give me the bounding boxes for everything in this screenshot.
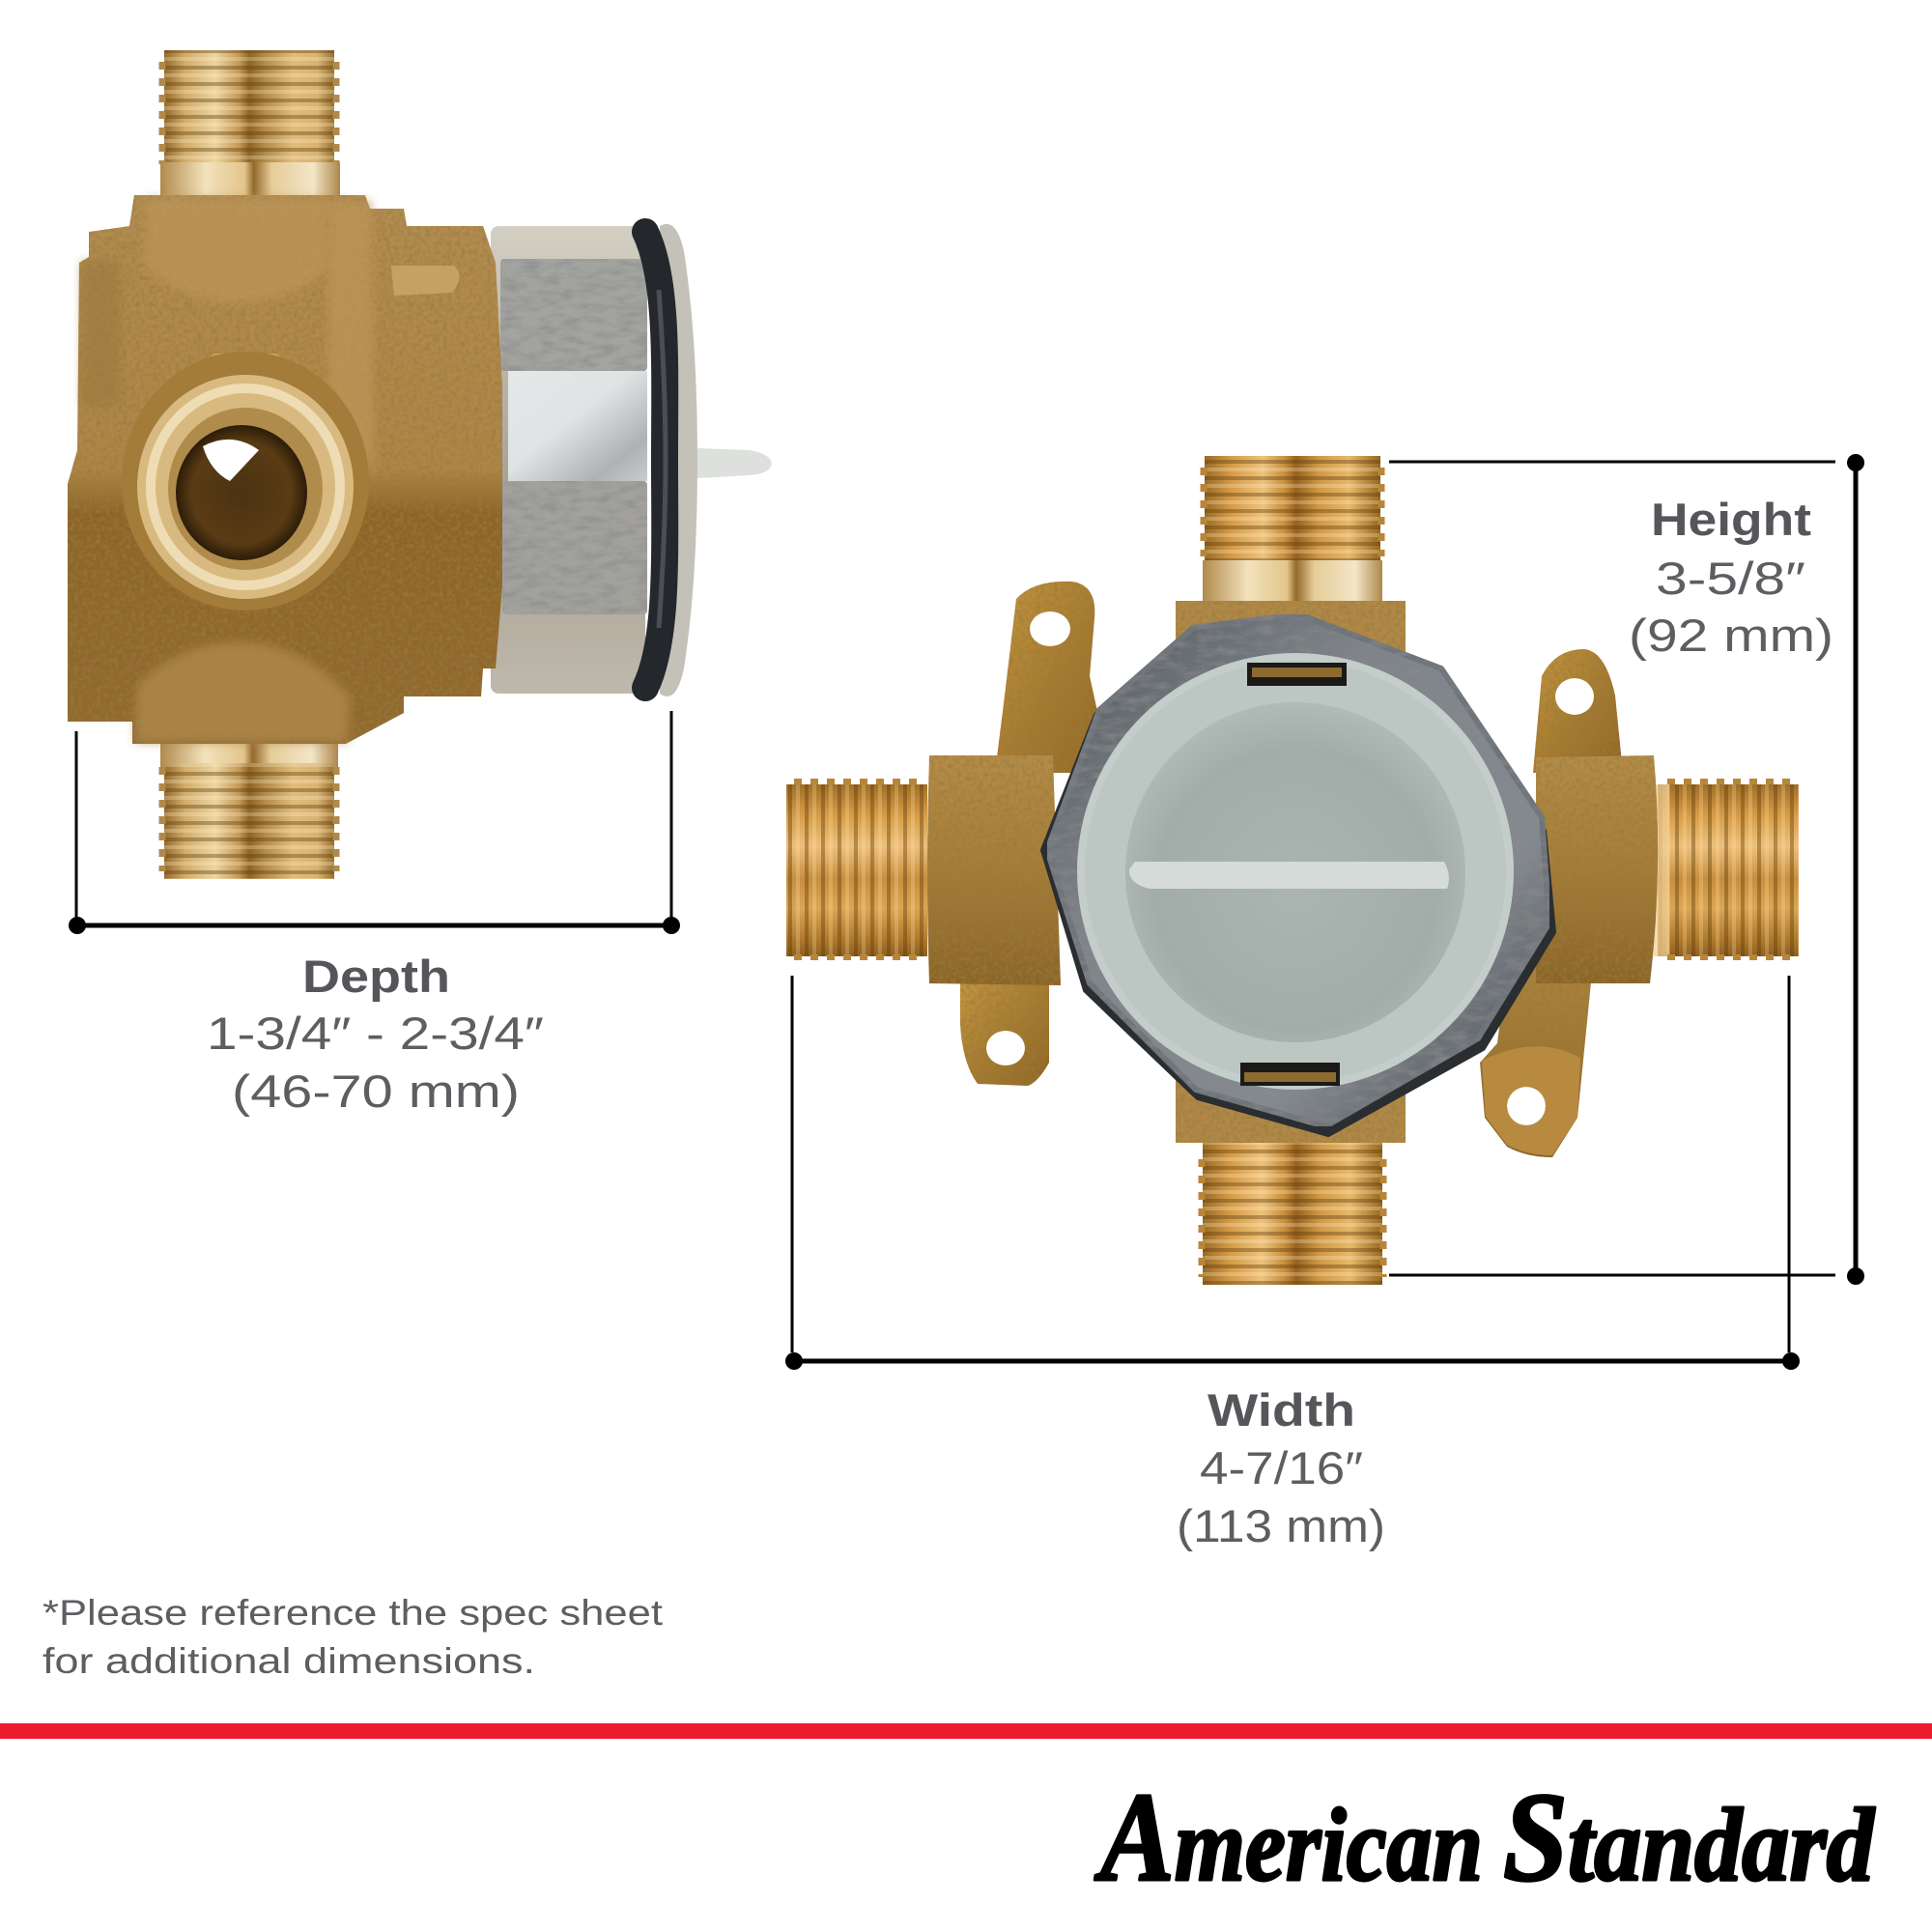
inner cup — [1125, 702, 1465, 1042]
brass body — [68, 195, 502, 744]
centre bar — [1129, 862, 1449, 889]
width label: Width — [1208, 1384, 1355, 1435]
depth dimension — [69, 711, 680, 934]
footnote: *Please reference the spec sheet — [43, 1593, 664, 1633]
indicator pin — [697, 448, 772, 478]
brand logo: American — [1094, 1766, 1483, 1908]
hex nut — [1043, 614, 1553, 1134]
vertical rib — [328, 201, 375, 478]
brand logo: Standard — [1503, 1766, 1876, 1908]
top threaded connector — [1203, 456, 1382, 601]
bottom threaded connector — [160, 734, 338, 879]
left edge recess — [81, 261, 120, 406]
width label: (113 mm) — [1177, 1500, 1385, 1551]
silver nut — [491, 226, 647, 694]
depth label — [207, 951, 544, 1117]
height label: Height — [1651, 494, 1811, 545]
width label — [1177, 1384, 1385, 1551]
brand logo — [1094, 1766, 1876, 1908]
top slot — [1247, 663, 1347, 686]
depth label: Depth — [302, 951, 450, 1002]
cast logo mark — [391, 266, 460, 296]
front view valve — [786, 456, 1799, 1285]
height label: (92 mm) — [1629, 610, 1833, 661]
footnote — [43, 1593, 664, 1681]
bottom-right mounting ear — [1480, 869, 1594, 1157]
side outlet port — [122, 352, 369, 611]
right body block — [1536, 755, 1658, 983]
depth label: 1-3/4″ - 2-3/4″ — [207, 1008, 544, 1059]
top-left mounting ear — [995, 582, 1111, 773]
depth label: (46-70 mm) — [232, 1065, 520, 1117]
left threaded connector — [786, 781, 927, 957]
right threaded connector — [1654, 781, 1799, 957]
bottom-left mounting ear — [960, 980, 1049, 1086]
height label — [1629, 494, 1833, 661]
lower dome — [135, 642, 350, 742]
side view valve — [68, 50, 772, 879]
light grey cartridge — [1077, 653, 1514, 1090]
red divider band — [0, 1723, 1932, 1739]
bore opening — [203, 440, 259, 481]
brass body with mounting ears — [927, 582, 1658, 1157]
left body block — [927, 755, 1061, 985]
flange and o-ring — [645, 224, 697, 696]
nut dark edge — [1043, 618, 1553, 1134]
bottom-right ear countersink — [1482, 1046, 1580, 1155]
top and bottom collars — [1176, 601, 1406, 1143]
bottom threaded connector — [1202, 1136, 1383, 1285]
width label: 4-7/16″ — [1200, 1442, 1363, 1493]
bottom slot — [1240, 1063, 1340, 1086]
top-right mounting ear — [1533, 649, 1623, 773]
height dimension — [1389, 454, 1864, 1285]
footnote: for additional dimensions. — [43, 1641, 535, 1681]
height label: 3-5/8″ — [1656, 553, 1805, 604]
upper dome — [145, 198, 327, 302]
top threaded connector — [160, 50, 340, 197]
width dimension — [785, 976, 1800, 1370]
